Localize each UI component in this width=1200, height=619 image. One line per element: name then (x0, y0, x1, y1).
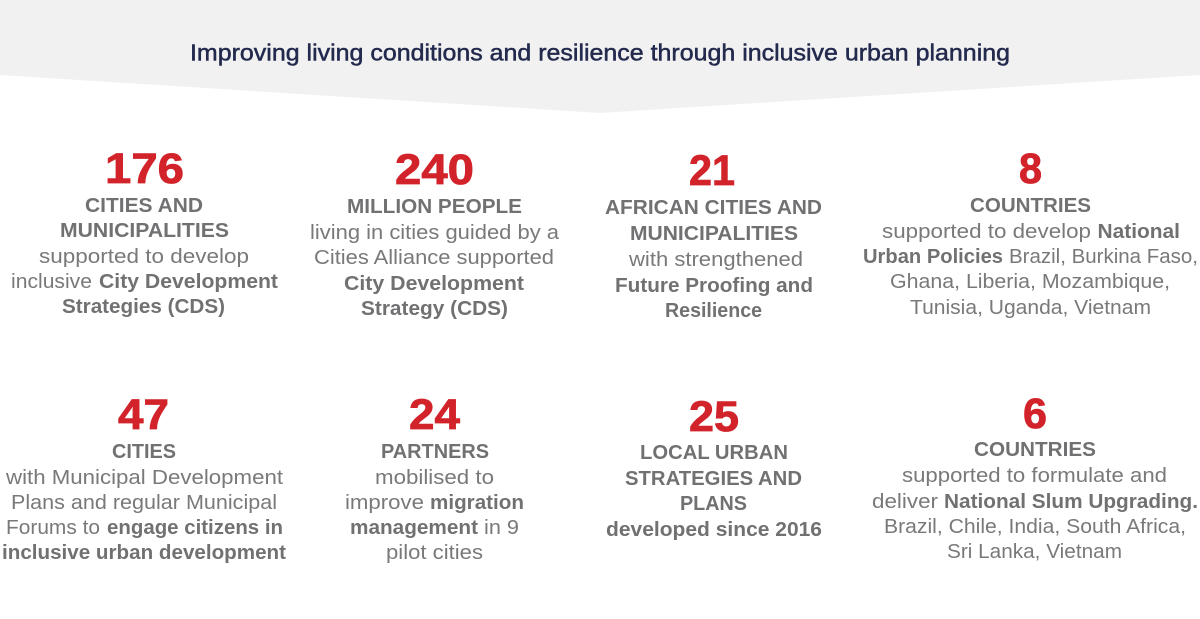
stat description: 47 (2, 440, 286, 564)
stat description: 25 (606, 441, 822, 541)
stat description: 47: Forums to (6, 516, 100, 539)
stat description: 25: STRATEGIES AND (625, 467, 802, 490)
stat description: 176: supported to develop (39, 245, 249, 268)
stat description: 176: inclusive (11, 270, 92, 293)
stat description: 240: Strategy (CDS) (361, 297, 508, 320)
stat description: 176: MUNICIPALITIES (60, 219, 229, 242)
stat description: 176: CITIES AND (85, 194, 203, 217)
stat description: 8 (863, 194, 1198, 319)
stat number: 176: 176 (105, 145, 184, 193)
stat description: 6: supported to formulate and (902, 464, 1167, 487)
stat description: 21: Future Proofing and (615, 274, 813, 297)
panel: 24 partners (345, 391, 524, 564)
stat description: 24: mobilised to (375, 466, 494, 489)
stat number: 25: 25 (689, 393, 739, 441)
header banner (0, 0, 1200, 113)
stat description: 176: City Development (99, 270, 278, 293)
stat description: 47: CITIES (112, 440, 176, 463)
panel: 25 local urban strategies and plans (606, 393, 822, 541)
stat description: 6: deliver (872, 490, 938, 513)
stat description: 8: Urban Policies (863, 245, 1003, 268)
stat number: 8: 8 (1019, 145, 1042, 193)
stat description: 8: Brazil, Burkina Faso, (1009, 245, 1198, 268)
stat description: 24: improve (345, 491, 424, 514)
stat description: 47: engage citizens in (107, 516, 283, 539)
stat number: 21: 21 (689, 147, 735, 195)
panel: 240 million people (310, 146, 560, 320)
stat description: 6: Sri Lanka, Vietnam (947, 540, 1122, 563)
stat description: 6: Brazil, Chile, India, South Africa, (884, 515, 1186, 538)
stat description: 6 (872, 438, 1198, 563)
stat description: 25: PLANS (680, 492, 747, 515)
stat number: 24: 24 (409, 391, 460, 439)
stat description: 8: COUNTRIES (970, 194, 1091, 217)
stat description: 240: Cities Alliance supported (314, 246, 554, 269)
stat description: 6: COUNTRIES (974, 438, 1096, 461)
stat number: 47: 47 (118, 391, 169, 439)
stat description: 21: AFRICAN CITIES AND (605, 196, 822, 219)
stat description: 21: MUNICIPALITIES (630, 222, 798, 245)
panel: 47 cities (2, 391, 286, 564)
stat description: 21: Resilience (665, 299, 762, 322)
stat description: 21 (605, 196, 822, 322)
stat number: 240: 240 (395, 146, 474, 194)
stat description: 8: supported to develop (882, 220, 1091, 243)
panel: 8 countries national urban policies (863, 145, 1198, 319)
stat description: 47: with Municipal Development (5, 466, 283, 489)
stat description: 25: LOCAL URBAN (640, 441, 788, 464)
panel: 21 African cities and municipalities (605, 147, 822, 322)
stat description: 6: National Slum Upgrading. (944, 490, 1198, 513)
stat description: 24: management (350, 516, 478, 539)
stat description: 21: with strengthened (628, 248, 803, 271)
stat description: 47: Plans and regular Municipal (11, 491, 277, 514)
title: Improving living conditions and resilience through inclusive urban planning (190, 40, 1010, 66)
stat description: 240: MILLION PEOPLE (347, 195, 522, 218)
stat description: 240: City Development (344, 272, 524, 295)
stat description: 176: Strategies (CDS) (62, 295, 225, 318)
panel: 6 countries national slum upgrading (872, 390, 1198, 563)
stat description: 24: pilot cities (386, 541, 483, 564)
stat description: 47: inclusive urban development (2, 541, 286, 564)
stat description: 240: living in cities guided by a (310, 221, 560, 244)
stat description: 24: in 9 (484, 516, 519, 539)
stat number: 6: 6 (1023, 390, 1047, 438)
stat description: 8: Tunisia, Uganda, Vietnam (910, 296, 1151, 319)
stat description: 176 (11, 194, 278, 318)
stat description: 25: developed since 2016 (606, 518, 822, 541)
stat description: 240 (310, 195, 560, 320)
panel: 176 cities and municipalities (11, 145, 278, 318)
stat description: 24: PARTNERS (381, 440, 489, 463)
stat description: 24: migration (430, 491, 524, 514)
stat description: 8: Ghana, Liberia, Mozambique, (890, 270, 1170, 293)
stat description: 24 (345, 440, 524, 564)
stat description: 8: National (1098, 220, 1180, 243)
